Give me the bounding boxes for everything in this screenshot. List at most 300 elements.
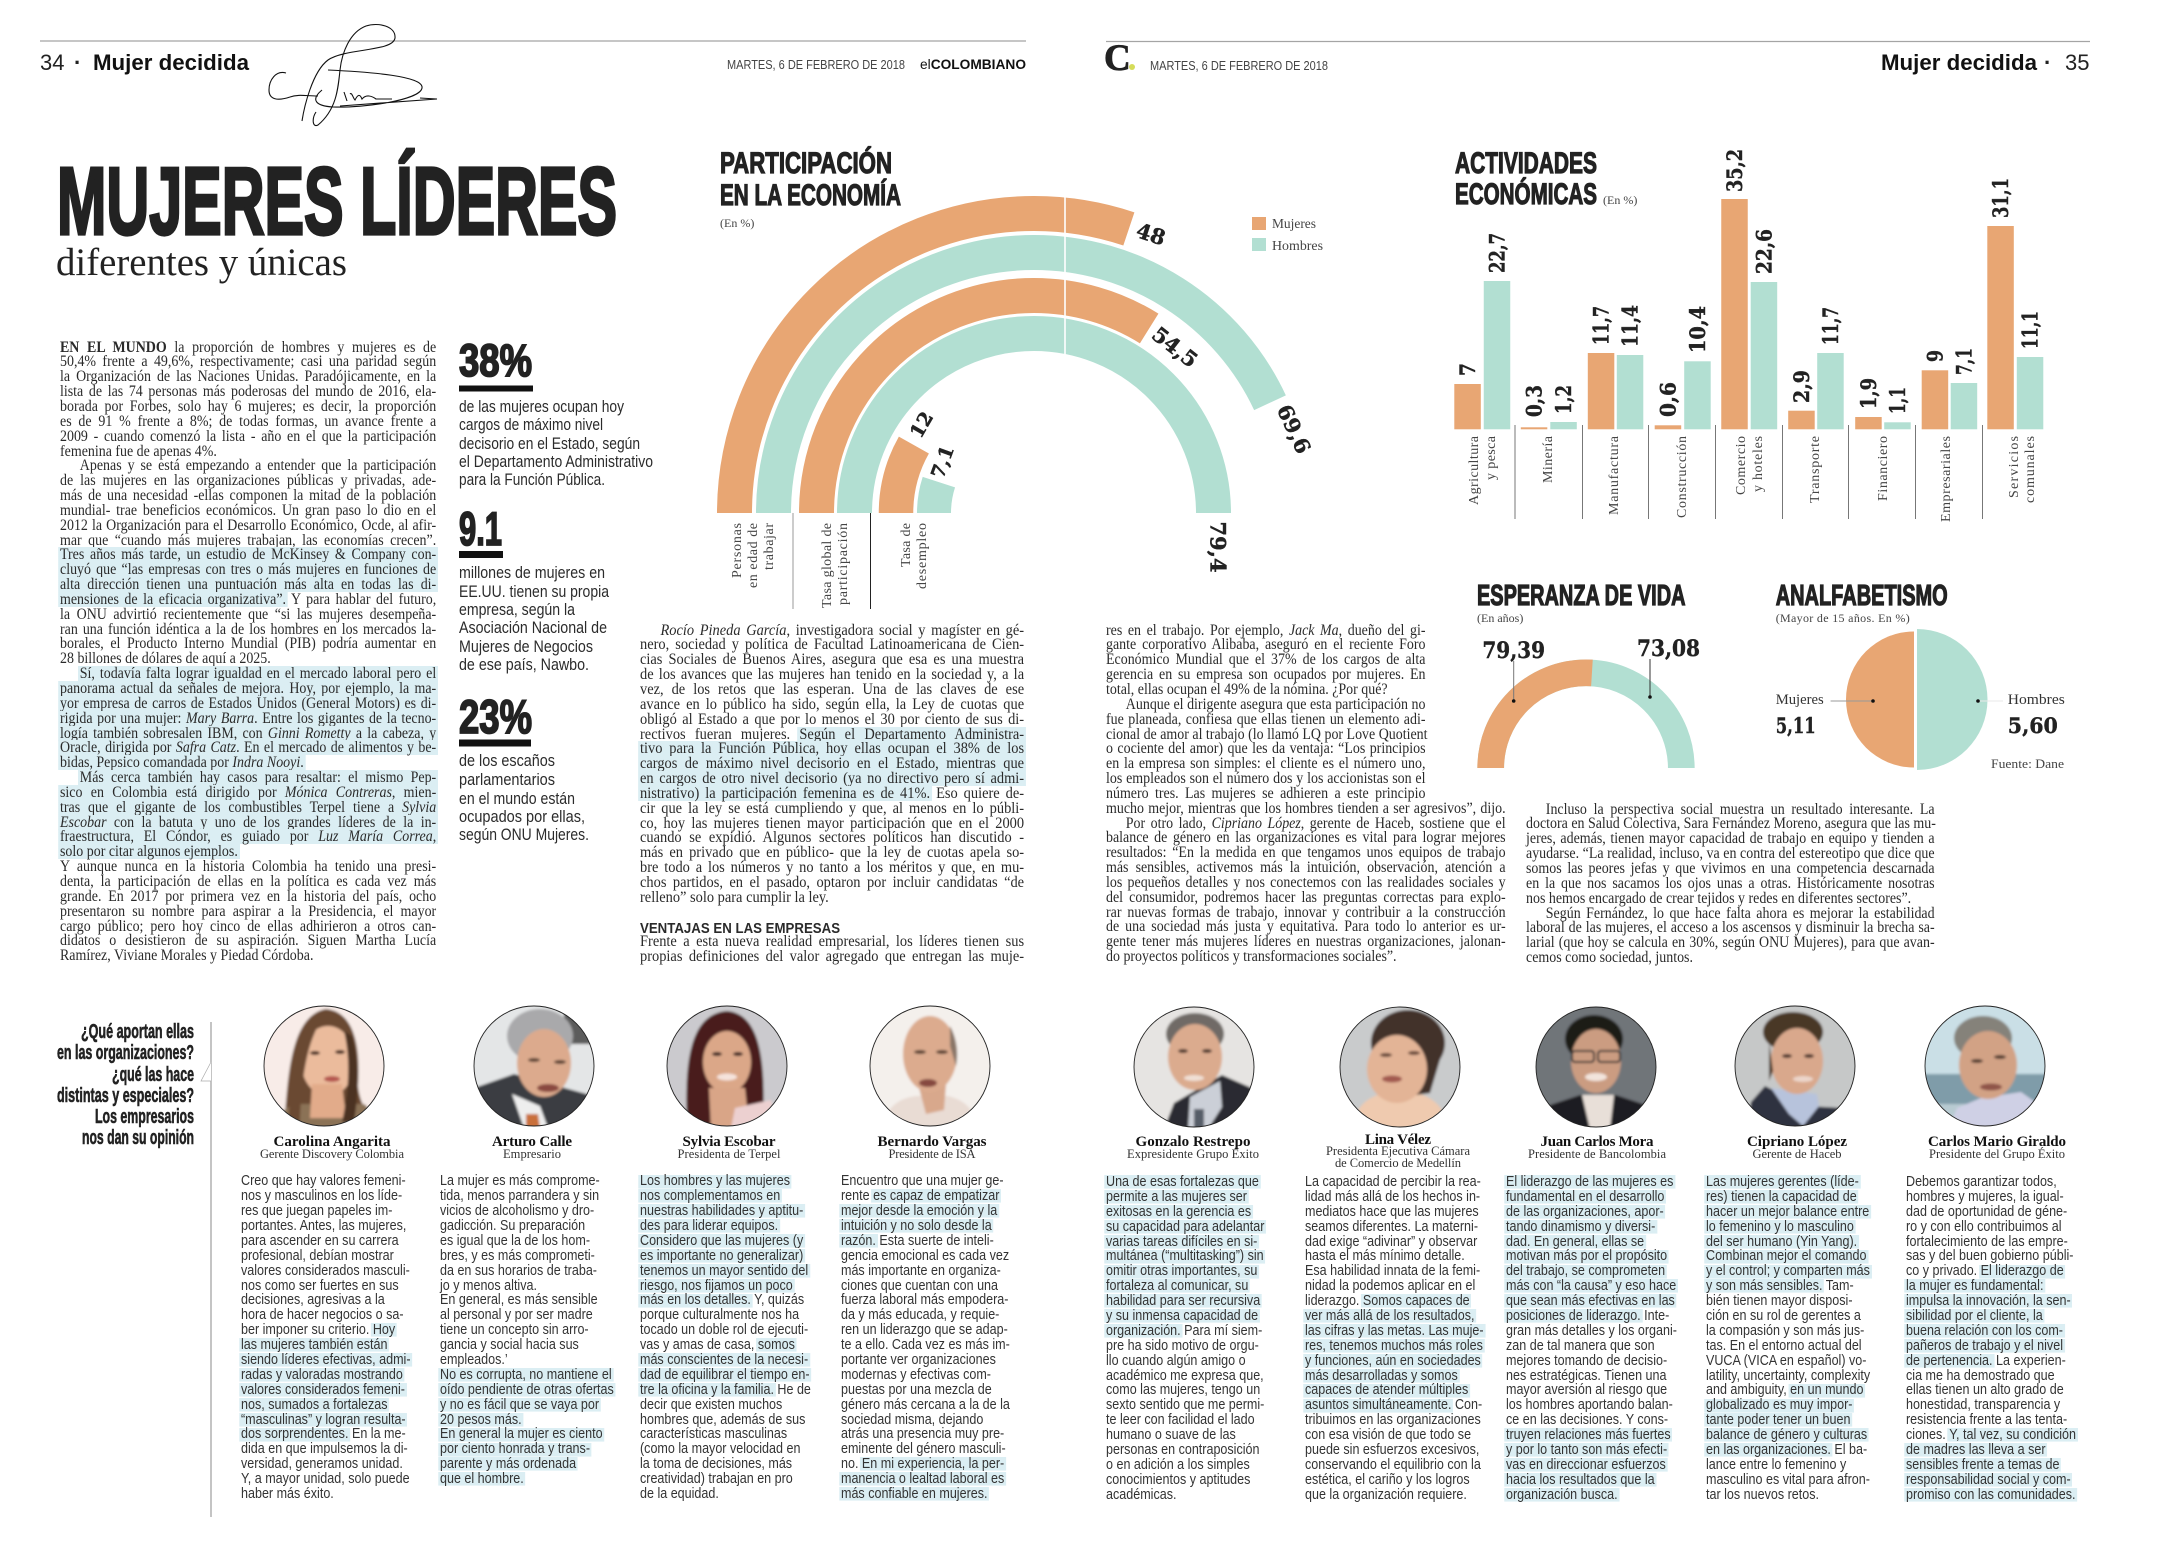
opinion: Bernardo Vargas <box>839 1173 1010 1502</box>
opinion: Bernardo Vargas: más confiable en mujeres. <box>841 1486 987 1502</box>
page header right <box>1104 38 2090 79</box>
article column 3: o cociente del amor) que les da ventaja: “Los principios <box>1106 740 1426 757</box>
opinion: Carolina Angarita: Y, a mayor unidad, solo puede <box>240 1471 409 1487</box>
opinion: Bernardo Vargas: atrás una presencia muy pre- <box>841 1426 1004 1442</box>
article column 2: nero, sociedad y política de Facultad Latinoamericana de Cien- <box>640 636 1024 653</box>
bar values <box>1455 149 2042 417</box>
opinion: Arturo Calle: tiene un concepto sin arro- <box>440 1322 589 1338</box>
opinion: Sylvia Escobar: porque culturalmente nos ha <box>640 1307 799 1323</box>
opinion: Carlos Mario Giraldo: hombres y mujeres, la igual- <box>1906 1189 2063 1205</box>
opinion: Carlos Mario Giraldo: pañeros de trabajo y el nivel <box>1906 1338 2062 1354</box>
opinion: Bernardo Vargas: razón. Esta suerte de inteli- <box>841 1233 993 1249</box>
article column 1: Tres años más tarde, un estudio de McKinsey & Company con- <box>60 546 437 563</box>
chart: analfabetismo: 5,60 <box>2008 713 2058 738</box>
article column 2 <box>638 622 1026 965</box>
opinion: Bernardo Vargas: más importante en organiza- <box>841 1263 1000 1279</box>
opinion: Cipriano López: y son más sensibles. Tam- <box>1706 1278 1854 1294</box>
opinion: Lina Vélez: estética, el cariño y los logros <box>1305 1472 1470 1488</box>
article column 3: Por otro lado, Cipriano López, gerente de Haceb, sostiene que el <box>1126 815 1506 832</box>
opinion: Cipriano López: masculino es vital para afron- <box>1706 1472 1870 1488</box>
bar category labels: Servicios <box>2007 436 2022 498</box>
opinion: Arturo Calle: gancia y social hacia sus <box>440 1337 579 1353</box>
opinion: Juan Carlos Mora: y por lo tanto son más efecti- <box>1506 1442 1667 1458</box>
opinion: Juan Carlos Mora: ce en las decisiones. Y cons- <box>1506 1412 1668 1428</box>
question callout: en las organizaciones? <box>57 1041 194 1064</box>
article column 3: de una sociedad más justa y equitativa. Para todo lo anterior es ur- <box>1106 918 1506 935</box>
question callout: Los empresarios <box>95 1105 194 1128</box>
name: Cipriano López: Cipriano López <box>1747 1134 1847 1150</box>
photo: Cipriano López <box>1733 1004 1857 1128</box>
stat: 23%: según ONU Mujeres. <box>459 825 589 844</box>
opinion: Bernardo Vargas: mejor desde la emoción y la <box>841 1203 997 1219</box>
opinion: Arturo Calle <box>438 1173 616 1487</box>
opinion: Carolina Angarita: res que juegan papeles im- <box>240 1203 392 1219</box>
opinion: Cipriano López: latility, uncertainty, complexity <box>1706 1368 1870 1384</box>
article column 1: EN EL MUNDO la proporción de hombres y mujeres es de <box>60 339 437 356</box>
opinion: Juan Carlos Mora: fundamental en el desarrollo <box>1506 1189 1664 1205</box>
opinion: Gonzalo Restrepo: fortaleza al comunicar, su <box>1106 1278 1248 1294</box>
opinion: Cipriano López: and ambiguity, en un mundo <box>1706 1382 1863 1398</box>
name: Sylvia Escobar: Sylvia Escobar <box>682 1134 776 1150</box>
stat: 38%: para la Función Pública. <box>459 470 605 489</box>
stat: 9.1: Asociación Nacional de <box>459 618 607 637</box>
opinion: Carlos Mario Giraldo: promiso con las comunidades. <box>1906 1487 2075 1503</box>
opinion: Arturo Calle: bres, y es más comprometi- <box>440 1248 595 1264</box>
article column 1: Sí, todavía falta lograr igualdad en el mercado laboral pero el <box>80 665 437 682</box>
opinion: Cipriano López: lance entre lo femenino y <box>1706 1457 1846 1473</box>
article column 1: ran una función idéntica a la de los hombres en los mercados la- <box>60 621 437 638</box>
article column 1: mensiones de la eficacia organizativa”. Y para hablar del futuro, <box>60 591 437 608</box>
bars heading <box>1455 147 1637 211</box>
article column 1: Escobar con la batuta y uno de los grandes líderes de la in- <box>60 814 437 831</box>
chart heading: (En %) <box>720 216 754 230</box>
opinion: Carlos Mario Giraldo: resistencia frente a las tenta- <box>1906 1412 2067 1428</box>
photo: Arturo Calle <box>472 1004 596 1128</box>
bar values: 9 <box>1922 350 1948 362</box>
chart: analfabetismo: Mujeres <box>1776 692 1824 708</box>
page header left: 34 <box>40 50 64 75</box>
opinion: Cipriano López: y el control; y comparten más <box>1706 1263 1870 1279</box>
stat: 9.1: millones de mujeres en <box>459 563 605 582</box>
article column 1: Ramírez, Viviane Morales y Piedad Córdoba. <box>60 947 314 964</box>
bar values: 7,1 <box>1952 348 1976 375</box>
arc category labels: Personas <box>730 523 745 578</box>
opinion: Juan Carlos Mora: mejores tomando de decisio- <box>1506 1353 1667 1369</box>
opinion: Sylvia Escobar: nos complementamos en <box>640 1188 781 1204</box>
stat: 9.1: Mujeres de Negocios <box>459 637 593 656</box>
opinion: Cipriano López: lo femenino y lo masculino <box>1706 1219 1854 1235</box>
opinion: Lina Vélez: asuntos simultáneamente. Con- <box>1305 1397 1482 1413</box>
article column 1: la ONU advirtió recientemente que “si las mujeres desempeña- <box>60 606 437 623</box>
article column 2: en cargos de otro nivel decisorio (ya no directivo pero sí admi- <box>640 770 1024 787</box>
name: Lina Vélez: Presidenta Ejecutiva Cámara <box>1326 1144 1470 1158</box>
article column 3: los pequeños detalles y nos conectemos con las realidades sociales y <box>1106 874 1506 891</box>
chart: participación en la economía <box>720 146 1334 609</box>
bar category labels: Comercio <box>1734 436 1749 495</box>
bar category labels <box>1467 435 2038 522</box>
chart: analfabetismo: ANALFABETISMO <box>1776 580 1948 612</box>
opinion: Carolina Angarita: siendo líderes efectivas, admi- <box>240 1352 410 1368</box>
opinion: Arturo Calle: No es corrupta, no mantiene el <box>440 1367 612 1383</box>
opinion: Carolina Angarita: nos como ser fuertes en sus <box>240 1278 398 1294</box>
opinion: Carlos Mario Giraldo: Debemos garantizar todos, <box>1906 1174 2056 1190</box>
chart: esperanza de vida: ESPERANZA DE VIDA <box>1477 580 1686 612</box>
opinion: Gonzalo Restrepo: académicas. <box>1106 1487 1176 1503</box>
opinion: Gonzalo Restrepo: exitosas en la gerencia es <box>1106 1204 1251 1220</box>
opinion: Juan Carlos Mora: dad. En general, ellas se <box>1506 1234 1644 1250</box>
name: Carolina Angarita <box>260 1134 404 1161</box>
opinion: Arturo Calle: tida, menos parrandera y sin <box>440 1188 599 1204</box>
opinion: Carolina Angarita: versidad, generamos unidad. <box>240 1456 402 1472</box>
bar values: 10,4 <box>1685 306 1710 353</box>
opinion: Sylvia Escobar: des para liderar equipos. <box>640 1218 779 1234</box>
title: MUJERES LÍDERES <box>57 148 617 255</box>
article column 4: somos las peores jefas y que vivimos en una competencia descarnada <box>1526 860 1935 877</box>
chart: analfabetismo <box>1776 580 2065 771</box>
arc category labels: Tasa de <box>899 523 914 567</box>
article column 2: obligó al Estado a que por lo menos el 30 por ciento de sus di- <box>640 711 1024 728</box>
article column 2: cuando se expidió. Algunos sectores políticos han discutido - <box>640 829 1024 846</box>
opinion: Cipriano López: Combinan mejor el comando <box>1706 1248 1866 1264</box>
stat: 9.1 <box>459 502 609 674</box>
article column 1: Oracle, dirigida por Safra Catz. En el mercado de alimentos y be- <box>60 739 437 756</box>
page header right: Mujer decidida <box>1881 50 2038 75</box>
bar category labels: Empresariales <box>1939 436 1954 522</box>
opinion: Lina Vélez: y funciones, aún en sociedades <box>1305 1353 1481 1369</box>
article column 1: cluyó que “las empresas con tres o más mujeres en funciones de <box>60 561 437 578</box>
article column 2: tivo para la Función Pública, hoy ellas ocupan el 38% de los <box>640 740 1024 757</box>
article column 4: jeres, además, tienen mayor capacidad de trabajo en equipo y tienden a <box>1526 830 1935 847</box>
opinion: Carolina Angarita: valores considerados femeni- <box>240 1382 404 1398</box>
opinion: Carlos Mario Giraldo: buena relación con los com- <box>1906 1323 2062 1339</box>
article column 1: la Organización de las Naciones Unidas. Paradójicamente, en la <box>60 368 437 385</box>
chart: esperanza de vida: 73,08 <box>1637 636 1700 662</box>
article column 2: relleno” solo para cumplir la ley. <box>640 889 829 906</box>
page header right: MARTES, 6 DE FEBRERO DE 2018 <box>1150 59 1328 73</box>
bar values: 2,9 <box>1789 370 1814 403</box>
stat: 38%: cargos de máximo nivel <box>459 415 603 434</box>
opinion: Gonzalo Restrepo: multánea (“multitasking”) sin <box>1106 1248 1263 1264</box>
article column 4: cemos como sociedad, juntos. <box>1526 949 1693 966</box>
opinion: Cipriano López: en las organizaciones. El ba- <box>1706 1442 1867 1458</box>
opinion: Sylvia Escobar: decir que existen muchos <box>640 1397 783 1413</box>
arc category labels: participación <box>836 523 851 605</box>
opinion: Lina Vélez: las cifras y las metas. Las muje- <box>1305 1323 1484 1339</box>
name: Bernardo Vargas: Presidente de ISA <box>888 1147 976 1161</box>
opinion: Carolina Angarita: dos sorprendentes. En la me- <box>240 1426 405 1442</box>
opinion: Sylvia Escobar: es importante no generalizar) <box>640 1248 804 1264</box>
opinion: Arturo Calle: En general, es más sensible <box>440 1292 598 1308</box>
opinion: Arturo Calle: es igual que la de los hom- <box>440 1233 590 1249</box>
opinion: Carlos Mario Giraldo <box>1904 1174 2078 1503</box>
opinion: Sylvia Escobar: dad de equilibrar el tiempo en- <box>640 1367 810 1383</box>
article column 1: 50,4% frente a 49,6%, respectivamente; casi una paridad según <box>60 353 437 370</box>
opinion: Juan Carlos Mora: de las organizaciones, apor- <box>1506 1204 1663 1220</box>
opinion: Juan Carlos Mora: vas en direccionar esfuerzos <box>1506 1457 1665 1473</box>
opinion: Lina Vélez: que la organización requiere. <box>1305 1487 1467 1503</box>
article column 1: mar que “cuando más mujeres trabajan, las economías crecen”. <box>60 532 437 549</box>
photo: Juan Carlos Mora <box>1534 1005 1658 1129</box>
name: Bernardo Vargas: Bernardo Vargas <box>878 1134 987 1150</box>
article column 1: Más cerca también hay casos para resaltar: el mismo Pep- <box>80 769 437 786</box>
name: Lina Vélez <box>1326 1132 1470 1170</box>
chart: esperanza de vida <box>1477 580 1700 768</box>
article column 2: Rocío Pineda García, investigadora social y magíster en gé- <box>660 622 1024 639</box>
article column 3: gerencia en su empresa son ocupados por mujeres. En <box>1106 666 1426 683</box>
arc values: 79,4 <box>1206 521 1230 573</box>
article column 2: vez, de los retos que las esperan. Una de las claves de ese <box>640 681 1024 698</box>
bar values: 11,7 <box>1588 306 1614 345</box>
opinion: Carolina Angarita: las mujeres también están <box>240 1337 387 1353</box>
arc legend <box>1252 216 1323 253</box>
opinion: Carolina Angarita: portantes. Antes, las mujeres, <box>240 1218 406 1234</box>
bar values: 0,3 <box>1522 385 1546 417</box>
opinion: Arturo Calle: empleados.’ <box>440 1352 508 1368</box>
stat: 38%: de las mujeres ocupan hoy <box>459 397 624 416</box>
opinion: Bernardo Vargas: no. En mi experiencia, la per- <box>841 1456 1004 1472</box>
article column 1: lista de las 74 personas más poderosas del mundo de 2016, ela- <box>60 383 437 400</box>
opinion: Lina Vélez: res, tenemos muchos más roles <box>1305 1338 1483 1354</box>
opinion: Lina Vélez: capaces de atender múltiples <box>1305 1382 1468 1398</box>
opinion: Carolina Angarita: dida en que impulsemos la di- <box>240 1441 407 1457</box>
opinion: Juan Carlos Mora: más con “la causa” y eso hace <box>1506 1278 1676 1294</box>
article column 1: presentaron su nombre para aspirar a la Presidencia, el mayor <box>60 903 437 920</box>
opinion: Gonzalo Restrepo: te leer con facilidad el lado <box>1106 1412 1254 1428</box>
opinion: Sylvia Escobar: riesgo, nos fijamos un poco <box>640 1278 793 1294</box>
opinion: Carlos Mario Giraldo: dad de oportunidad de géne- <box>1906 1204 2067 1220</box>
opinion: Cipriano López: ción en su rol de gerentes a <box>1706 1308 1861 1324</box>
opinion: Sylvia Escobar: Los hombres y las mujeres <box>640 1173 790 1189</box>
opinion: Juan Carlos Mora: los hombres aportando balan- <box>1506 1397 1672 1413</box>
opinion: Cipriano López: tar los nuevos retos. <box>1706 1487 1819 1503</box>
opinion: Lina Vélez: hasta el más mínimo detalle. <box>1305 1248 1465 1264</box>
opinion: Lina Vélez: tribuimos en las organizaciones <box>1305 1412 1481 1428</box>
page header right: 35 <box>2065 50 2089 75</box>
question callout: nos dan su opinión <box>82 1126 194 1149</box>
stat: 38%: decisorio en el Estado, según <box>459 434 640 453</box>
article column 2: cargos de máximo nivel decisorio en el Estado, mientras que <box>640 755 1024 772</box>
photo: Carolina Angarita <box>262 1004 386 1128</box>
article column 3: total, ellas ocupan el 49% de la nómina. ¿Por qué? <box>1106 681 1388 698</box>
article column 3: los empleados son el número dos y los accionistas son el <box>1106 770 1426 787</box>
opinion: Carolina Angarita: Creo que hay valores femeni- <box>240 1173 405 1189</box>
bar category labels: Minería <box>1541 435 1556 483</box>
article column 4: larial (que hoy se calcula en 30%, según ONU Mujeres), para que avan- <box>1526 934 1935 951</box>
opinion: Arturo Calle: por ciento honrada y trans- <box>440 1441 590 1457</box>
opinion: Carlos Mario Giraldo: impulsa la innovación, la sen- <box>1906 1293 2070 1309</box>
opinion: Lina Vélez: puede sin esfuerzos excesivos, <box>1305 1442 1479 1458</box>
opinion: Sylvia Escobar: de la equidad. <box>640 1486 719 1502</box>
article column 3: en la empresa son simples: el cliente es el número uno, <box>1106 755 1426 772</box>
opinion: Lina Vélez: conservando el equilibrio con la <box>1305 1457 1481 1473</box>
opinion: Juan Carlos Mora: zan de tal manera que son <box>1506 1338 1654 1354</box>
signature <box>269 24 437 126</box>
opinion: Cipriano López: del ser humano (Yin Yang). <box>1706 1234 1857 1250</box>
article column 3: número tres. Las mujeres se adhieren a este principio <box>1106 785 1426 802</box>
arc category labels <box>730 513 930 609</box>
opinion: Lina Vélez: con esa visión de que todo se <box>1305 1427 1471 1443</box>
name: Carlos Mario Giraldo <box>1928 1134 2066 1161</box>
opinion: Arturo Calle: 20 pesos más. <box>440 1412 522 1428</box>
opinion: Sylvia Escobar: Considero que las mujeres (y <box>640 1233 804 1249</box>
opinion: Gonzalo Restrepo: Una de esas fortalezas que <box>1106 1174 1258 1190</box>
opinion: Cipriano López: tas. En el entorno actual del <box>1706 1338 1862 1354</box>
name: Arturo Calle <box>492 1134 572 1161</box>
article column 1: borada por Forbes, solo hay 6 mujeres; es decir, la proporción <box>60 398 437 415</box>
opinion: Sylvia Escobar: tocado un doble rol de ejecuti- <box>640 1322 809 1338</box>
article column 1: Y aunque nunca en la historia Colombia ha tenido una presi- <box>60 858 437 875</box>
opinion: Bernardo Vargas: modernas y efectivas com- <box>841 1367 991 1383</box>
opinion: Carlos Mario Giraldo: de pertenencia. La experien- <box>1906 1353 2065 1369</box>
opinion: Sylvia Escobar <box>638 1173 812 1502</box>
article column 2: VENTAJAS EN LAS EMPRESAS <box>640 920 840 937</box>
opinion: Bernardo Vargas: manencia o lealtad laboral es <box>841 1471 1004 1487</box>
opinion: Gonzalo Restrepo: varias tareas difíciles en si- <box>1106 1234 1257 1250</box>
arcs <box>734 190 1334 513</box>
article column 2: Frente a esta nueva realidad empresarial, los líderes tienen sus <box>640 933 1024 950</box>
opinion: Juan Carlos Mora: nes estratégicas. Tienen una <box>1506 1368 1666 1384</box>
article column 3: gente tener más mujeres líderes en nuestras organizaciones, jalonan- <box>1106 933 1506 950</box>
bar category labels: y pesca <box>1484 435 1499 480</box>
article column 4 <box>1526 801 1936 966</box>
article column 3: fue planeada, confiesa que ellas tienen un elemento adi- <box>1106 711 1426 728</box>
opinion: Cipriano López <box>1704 1174 1872 1503</box>
article column 4: laboral de las mujeres, el acceso a los ascensos y disminuir la brecha sa- <box>1526 919 1935 936</box>
opinion: Gonzalo Restrepo: y su inmensa capacidad de <box>1106 1308 1258 1324</box>
name: Cipriano López: Gerente de Haceb <box>1752 1147 1842 1161</box>
name: Lina Vélez: Lina Vélez <box>1365 1132 1431 1148</box>
article column 1: mundial- trae beneficios económicos. Un gran paso lo dio en el <box>60 502 437 519</box>
bar values: 0,6 <box>1656 382 1680 417</box>
opinion: Sylvia Escobar: tre la oficina y la familia. He de <box>640 1382 811 1398</box>
name: Carlos Mario Giraldo: Carlos Mario Giraldo <box>1928 1134 2066 1150</box>
chart: analfabetismo: 5,11 <box>1776 713 1816 738</box>
arc values <box>906 218 1316 573</box>
opinion: Carolina Angarita: profesional, debían mostrar <box>240 1248 393 1264</box>
logo C: C <box>1104 38 1131 79</box>
photo: Gonzalo Restrepo <box>1132 1005 1256 1129</box>
name: Arturo Calle: Arturo Calle <box>492 1134 572 1150</box>
question callout: ¿Qué aportan ellas <box>81 1020 194 1043</box>
article column 2: chos partidos, en el pasado, optaron por incluir candidatas “de <box>640 874 1024 891</box>
name: Juan Carlos Mora: Juan Carlos Mora <box>1540 1134 1654 1150</box>
opinion: Lina Vélez: mediatos hace que las mujeres <box>1305 1204 1479 1220</box>
stat: 38%: el Departamento Administrativo <box>459 452 653 471</box>
article column 1: borales, el Producto Interno Mundial (PIB) podría aumentar en <box>60 635 437 652</box>
opinion: Gonzalo Restrepo: pre ha sido motivo de orgu- <box>1106 1338 1258 1354</box>
opinion: Carlos Mario Giraldo: fortalecimiento de las empre- <box>1906 1234 2067 1250</box>
chart: actividades económicas <box>1454 147 2043 522</box>
name: Sylvia Escobar: Presidenta de Terpel <box>678 1147 781 1161</box>
opinion: Arturo Calle: parente y más ordenada <box>440 1456 576 1472</box>
opinion: Lina Vélez: ver más allá de los resultados, <box>1305 1308 1475 1324</box>
article column 3: do proyectos políticos y transformaciones sociales”. <box>1106 948 1397 965</box>
opinion: Gonzalo Restrepo <box>1104 1174 1266 1503</box>
chart: analfabetismo: Fuente: Dane <box>1991 757 2064 771</box>
opinion: Gonzalo Restrepo: su capacidad para adelantar <box>1106 1219 1264 1235</box>
opinion: Arturo Calle: jo y menos altiva. <box>440 1278 537 1294</box>
page header left <box>40 41 1026 75</box>
opinion: Carlos Mario Giraldo: sibilidad por el cliente, la <box>1906 1308 2042 1324</box>
bars <box>1454 199 2043 429</box>
article column 3: más sensibles, activemos más la intuición, observación, atención a <box>1106 859 1506 876</box>
opinion: Cipriano López: VUCA (VICA en español) vo- <box>1706 1353 1866 1369</box>
stat: 23%: parlamentarios <box>459 770 555 789</box>
stat: 9.1: EE.UU. tienen su propia <box>459 582 609 601</box>
name: Carolina Angarita: Carolina Angarita <box>274 1134 391 1150</box>
opinion: Gonzalo Restrepo: llo cuando algún amigo o <box>1106 1353 1245 1369</box>
opinion: Bernardo Vargas: rente es capaz de empatizar <box>841 1188 999 1204</box>
article column 2: cias Sociales de Buenos Aires, asegura que esa es una muestra <box>640 651 1024 668</box>
chart: esperanza de vida: (En años) <box>1477 611 1523 625</box>
chart heading: PARTICIPACIÓN <box>720 146 892 180</box>
bars heading: (En %) <box>1603 193 1637 207</box>
opinion: Juan Carlos Mora: gran más detalles y los organi- <box>1506 1323 1676 1339</box>
article column 1: solo por citar algunos ejemplos. <box>60 843 238 860</box>
opinion: Sylvia Escobar: (como la mayor velocidad en <box>640 1441 801 1457</box>
opinion: Bernardo Vargas: género más cercana a la de la <box>841 1397 1009 1413</box>
article column 3 <box>1106 622 1506 965</box>
opinion: Arturo Calle: En general la mujer es ciento <box>440 1426 603 1442</box>
article column 1: fraestructura, El Cóndor, es guiado por Luz María Correa, <box>60 828 437 845</box>
article column 4: doctora en Salud Colectiva, Sara Fernández Moreno, asegura que las mu- <box>1526 815 1936 832</box>
bar category labels: Construcción <box>1675 436 1690 518</box>
opinion: Juan Carlos Mora: El liderazgo de las mujeres es <box>1506 1174 1673 1190</box>
opinion: Arturo Calle: que el hombre. <box>440 1471 524 1487</box>
name: Cipriano López <box>1747 1134 1847 1161</box>
opinion: Gonzalo Restrepo: personas en contraposición <box>1106 1442 1259 1458</box>
opinion: Lina Vélez: dad exige “adivinar” y observar <box>1305 1234 1477 1250</box>
opinion: Carolina Angarita: haber más éxito. <box>240 1486 333 1502</box>
article column 1: 2009 - cuando comenzó la lista - año en el que la participación <box>60 428 437 445</box>
bars heading: ACTIVIDADES <box>1455 147 1597 180</box>
photo: Bernardo Vargas <box>868 1004 992 1128</box>
opinion: Gonzalo Restrepo: omitir otras importantes, su <box>1106 1263 1257 1279</box>
chart: esperanza de vida: 79,39 <box>1482 638 1545 664</box>
article column 2: co, hoy las mujeres tienen mayor participación que en el 2000 <box>640 815 1024 832</box>
photo: Carlos Mario Giraldo <box>1923 1004 2047 1130</box>
article column 2: de los avances que las mujeres han tenido en la sociedad y, a la <box>640 666 1024 683</box>
stat: 23%: en el mundo están <box>459 789 575 808</box>
page header left: MARTES, 6 DE FEBRERO DE 2018 <box>727 58 905 72</box>
article column 4: Según Fernández, lo que hace falta ahora es mejorar la estabilidad <box>1546 904 1935 922</box>
opinion: Juan Carlos Mora: organización busca. <box>1506 1487 1617 1503</box>
subtitle: diferentes y únicas <box>56 241 347 284</box>
arc category labels: trabajar <box>762 523 777 570</box>
opinion: Cipriano López: tante poder tener un buen <box>1706 1412 1850 1428</box>
article column 3: res en el trabajo. Por ejemplo, Jack Ma, dueño del gi- <box>1106 622 1426 639</box>
opinion: Juan Carlos Mora: truyen relaciones más fuertes <box>1506 1427 1670 1443</box>
opinion: Arturo Calle: La mujer es más comprome- <box>440 1173 600 1189</box>
article column 3: Económico Mundial que el 37% de los cargos de alta <box>1106 651 1426 668</box>
bar values: 22,6 <box>1752 229 1776 274</box>
article column 1: sico en Colombia está dirigido por Mónica Contreras, mien- <box>60 784 437 801</box>
page header right: · <box>2044 50 2051 75</box>
opinion: Carlos Mario Giraldo: co y privado. El liderazgo de <box>1906 1263 2063 1279</box>
opinion: Juan Carlos Mora: mayor aversión al riesgo que <box>1506 1382 1667 1398</box>
article column 3: rar nuevas formas de trabajo, innovar y contribuir a la construcción <box>1106 904 1506 921</box>
opinion: Lina Vélez: lidad más allá de los hechos in- <box>1305 1189 1480 1205</box>
photo: Sylvia Escobar <box>665 1004 789 1128</box>
stat: 38%: 38% <box>459 335 532 386</box>
opinion: Arturo Calle: da en sus horarios de traba- <box>440 1263 597 1279</box>
opinion: Sylvia Escobar: vas y amas de casa, somos <box>640 1337 795 1353</box>
opinion: Bernardo Vargas: te a ello. Cada vez es más im- <box>841 1337 1009 1353</box>
opinion: Lina Vélez: seamos diferentes. La materni- <box>1305 1219 1478 1235</box>
article column 2: más en privado que en público- que la ley de cuotas apela so- <box>640 844 1024 861</box>
arc values: 48 <box>1133 218 1169 250</box>
article column 2: avance en lo público ha sido, según ella, la Ley de cuotas que <box>640 696 1024 713</box>
